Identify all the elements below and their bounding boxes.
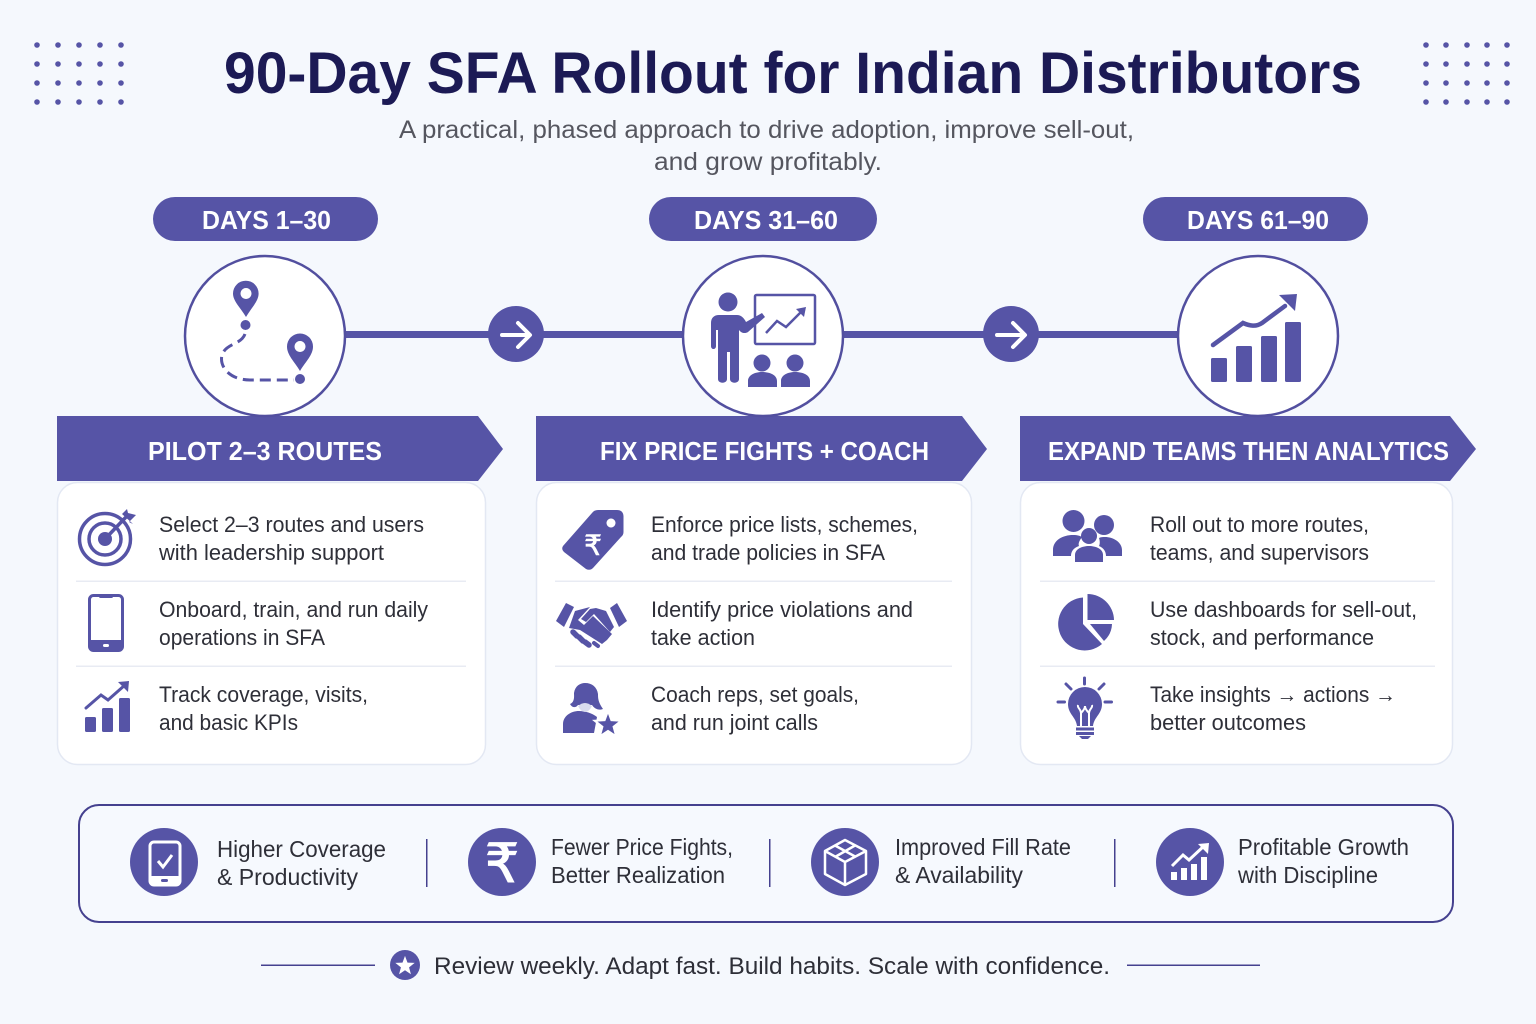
text: step 1: Select 2–3 routes and users: [159, 512, 424, 537]
icon: rupee price tag: [562, 510, 624, 570]
text: higher coverage: Higher Coverage: [217, 836, 386, 862]
text: profitable growth: [1237, 834, 1409, 888]
icon: star badge: [390, 950, 420, 980]
icon: light bulb: [1058, 678, 1112, 739]
text: step 3: and run joint calls: [651, 710, 818, 735]
pill: days 1-30: DAYS 1–30: [202, 205, 331, 235]
icon: rupee price tag: ₹: [584, 530, 602, 561]
text: improved fill rate: & Availability: [895, 862, 1023, 888]
text: step 3: [1150, 682, 1396, 735]
arrow: phase 1 to phase 2: [488, 306, 544, 362]
text: step 3: Coach reps, set goals,: [651, 682, 859, 707]
text: step 2: [651, 597, 913, 650]
text: step 2: Identify price violations and: [651, 597, 913, 622]
text: step 3: and basic KPIs: [159, 710, 298, 735]
pill: days 1-30: [153, 197, 378, 241]
pill: days 61-90: DAYS 61–90: [1187, 205, 1329, 235]
subtitle: [399, 116, 1134, 176]
icon: phone check badge: [130, 828, 198, 896]
text: fewer price fights: [551, 834, 733, 888]
icon: rupee badge: ₹: [485, 834, 519, 894]
text: step 3: Track coverage, visits,: [159, 682, 368, 707]
text: step 2: [159, 597, 428, 650]
panel: outcomes strip: [79, 805, 1453, 922]
text: step 2: [1150, 597, 1417, 650]
text: higher coverage: & Productivity: [217, 864, 358, 890]
banner: expand teams: EXPAND TEAMS THEN ANALYTICS: [1048, 436, 1449, 466]
text: step 1: [158, 512, 424, 565]
pill: days 31-60: [649, 197, 877, 241]
text: step 1: [1150, 512, 1369, 565]
text: step 1: and trade policies in SFA: [651, 540, 885, 565]
banner: expand teams: [1020, 416, 1476, 481]
text: improved fill rate: Improved Fill Rate: [895, 834, 1071, 860]
text: profitable growth: Profitable Growth: [1238, 834, 1409, 860]
text: step 1: Enforce price lists, schemes,: [651, 512, 918, 537]
icon: target: [80, 509, 136, 564]
text: improved fill rate: [895, 834, 1071, 888]
text: step 2: take action: [651, 625, 755, 650]
icon: team: [1053, 510, 1122, 562]
banner: pilot routes: [57, 416, 503, 481]
banner: fix price fights: [536, 416, 987, 481]
subtitle: and grow profitably.: [654, 148, 882, 176]
text: step 2: Onboard, train, and run daily: [159, 597, 428, 622]
text: step 1: with leadership support: [158, 540, 384, 565]
panel: phase 1 steps: [58, 482, 486, 764]
text: step 3: Take insights → actions →: [1150, 682, 1396, 707]
tagline text: Review weekly. Adapt fast. Build habits. Scale with confidence.: [434, 953, 1110, 980]
icon: pie chart: [1058, 594, 1114, 650]
icon: handshake: [556, 603, 627, 646]
icon: presenter with chart in circle: [683, 256, 843, 416]
arrow: phase 2 to phase 3: [983, 306, 1039, 362]
banner: fix price fights: FIX PRICE FIGHTS + COACH: [600, 436, 929, 466]
timeline connector line: [340, 331, 1185, 338]
icon: small bar chart: [85, 681, 130, 732]
text: profitable growth: with Discipline: [1237, 862, 1378, 888]
banner: pilot routes: PILOT 2–3 ROUTES: [148, 436, 382, 466]
text: fewer price fights: Fewer Price Fights,: [551, 834, 733, 860]
text: fewer price fights: Better Realization: [551, 862, 725, 888]
text: step 1: Roll out to more routes,: [1150, 512, 1369, 537]
icon: box badge: [811, 828, 879, 896]
icon: coach with star: [563, 683, 621, 736]
pill: days 31-60: DAYS 31–60: [694, 205, 838, 235]
footer tagline: [261, 950, 1260, 980]
panel: phase 3 steps: [1020, 482, 1452, 764]
subtitle: A practical, phased approach to drive adoption, improve sell-out,: [399, 116, 1134, 144]
title: 90-Day SFA Rollout for Indian Distributors: [224, 41, 1362, 106]
icon: growth chart in circle: [1178, 256, 1338, 416]
text: step 3: [651, 682, 859, 735]
icon: smartphone: [90, 595, 122, 651]
icon: route map in circle: [185, 256, 345, 416]
text: step 3: better outcomes: [1150, 710, 1306, 735]
text: step 1: [651, 512, 918, 565]
text: step 3: [159, 682, 368, 735]
text: step 2: operations in SFA: [159, 625, 325, 650]
decorative dot grid: top right: [1423, 42, 1510, 105]
decorative dot grid: top left: [34, 42, 124, 105]
panel: phase 2 steps: [536, 482, 972, 764]
icon: growth badge: [1156, 828, 1224, 896]
text: step 2: Use dashboards for sell-out,: [1150, 597, 1417, 622]
text: step 2: stock, and performance: [1150, 625, 1374, 650]
icon: rupee badge: [468, 828, 536, 896]
text: step 1: teams, and supervisors: [1150, 540, 1369, 565]
text: higher coverage: [217, 836, 386, 890]
pill: days 61-90: [1143, 197, 1368, 241]
